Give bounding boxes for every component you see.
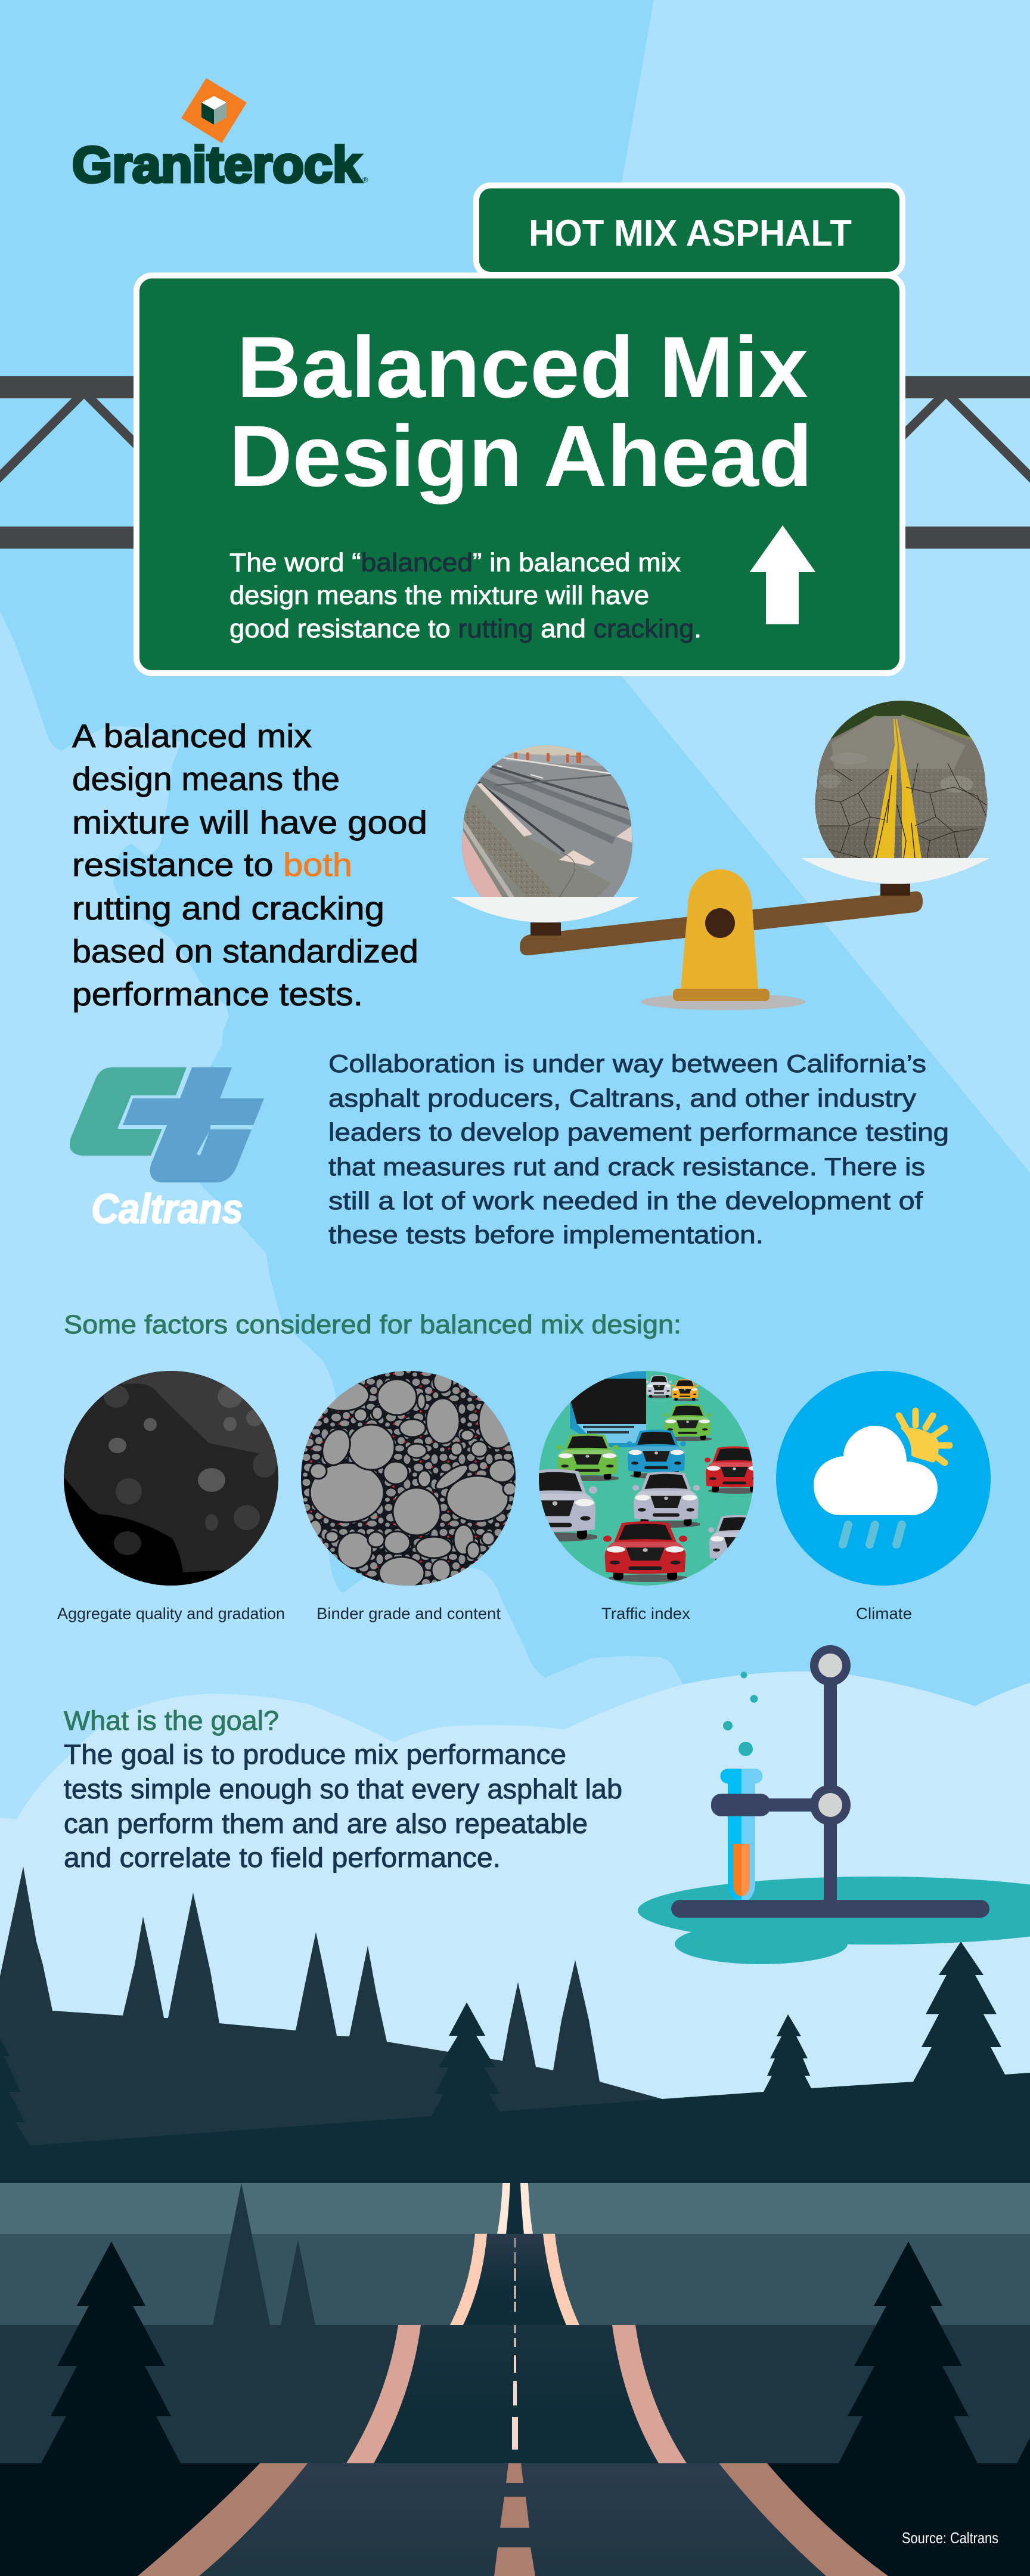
photo: rutted road (459, 742, 635, 900)
sign body text: design means the mixture will have (229, 581, 649, 610)
goal body: can perform them and are also repeatable (64, 1808, 588, 1839)
bus (570, 1371, 646, 1447)
road: third section (346, 2325, 687, 2463)
factor: traffic circle (539, 1371, 753, 1586)
factor: aggregate circle (60, 1366, 283, 1592)
teal puddle (638, 1877, 1030, 1964)
text: balanced mix definition: design means the (72, 760, 340, 797)
logo: Caltrans (70, 1067, 264, 1232)
text: balanced mix definition: rutting and cracking (72, 890, 384, 927)
factor: climate circle (776, 1371, 991, 1586)
text: collaboration paragraph: leaders to develop pavement performance testing (328, 1118, 949, 1146)
icon: up arrow (750, 525, 815, 624)
captions: Binder grade and content (317, 1605, 501, 1623)
road: far section (497, 2183, 533, 2234)
logo: Caltrans: Caltrans (91, 1185, 243, 1232)
photo: cracked road (813, 698, 989, 862)
captions: Traffic index (601, 1605, 691, 1623)
text: balanced mix definition: mixture will have good (72, 804, 427, 841)
text: collaboration paragraph: that measures rut and crack resistance. There is (328, 1153, 925, 1181)
text: collaboration paragraph (328, 1049, 949, 1249)
source credit: Source: Caltrans (902, 2529, 998, 2547)
goal body: and correlate to field performance. (64, 1842, 501, 1873)
heading: factors: Some factors considered for balanced mix design: (64, 1310, 681, 1339)
registered mark: ® (362, 175, 368, 184)
scale beam (520, 891, 923, 955)
text: balanced mix definition: performance tests. (72, 976, 363, 1013)
text: balanced mix definition: based on standardized (72, 933, 418, 970)
road landscape bands (0, 2183, 1030, 2576)
road: second section (450, 2234, 579, 2325)
background: upper right pale panel (622, 0, 1030, 1173)
icon: rain (843, 1525, 902, 1544)
front ridge with conifers (0, 1942, 1030, 2184)
text: balanced mix definition (72, 717, 427, 1013)
text: goal (64, 1705, 622, 1873)
right pan (801, 858, 989, 884)
goal body: The goal is to produce mix performance (64, 1739, 566, 1770)
bubbles (723, 1672, 758, 1756)
sign: main panel (136, 275, 902, 673)
factor: binder circle (298, 1368, 519, 1589)
goal body (64, 1739, 622, 1873)
background: pale cloud bank (0, 1671, 1030, 2206)
stand (671, 1645, 989, 1918)
text: collaboration paragraph: still a lot of work needed in the development of (328, 1187, 923, 1215)
foreground left tree (41, 2241, 181, 2463)
captions: Climate (856, 1605, 912, 1623)
foreground edge tree (1017, 2438, 1030, 2463)
left pan (451, 897, 640, 922)
scale stand shadow (641, 993, 805, 1010)
lab test tube illustration (638, 1645, 1030, 1964)
scale pivot (705, 908, 735, 938)
test tube (720, 1769, 763, 1902)
sign title (229, 318, 812, 504)
text: balanced mix definition: A balanced mix (72, 717, 312, 754)
goal heading: What is the goal? (64, 1705, 279, 1736)
logo wordmark: Graniterock (72, 137, 361, 193)
scale stand (681, 869, 758, 990)
sign title: Balanced Mix (237, 318, 808, 416)
foreground right tree (839, 2241, 978, 2463)
logo mark: orange diamond with cube (181, 78, 247, 143)
text: collaboration paragraph: asphalt producers, Caltrans, and other industry (328, 1084, 916, 1112)
balance scale illustration (451, 698, 989, 1010)
text: collaboration paragraph: Collaboration is under way between California’s (328, 1049, 926, 1078)
right pan stem (880, 884, 910, 896)
sign: hot mix asphalt tab (476, 185, 902, 275)
text: balanced mix definition: resistance to both (72, 846, 352, 883)
distant trees on band (213, 2183, 315, 2325)
scale foot (673, 989, 770, 1001)
back ridge with conifers (0, 1866, 662, 2182)
logo: Graniterock (72, 78, 361, 193)
icon: cloud (814, 1426, 938, 1515)
bridge truss behind sign (0, 376, 1030, 549)
sign title: Design Ahead (229, 407, 812, 504)
road: foreground section (138, 2463, 888, 2576)
goal body: tests simple enough so that every asphalt lab (64, 1773, 622, 1804)
sign body text (229, 548, 702, 643)
sign body text: good resistance to rutting and cracking. (229, 614, 702, 643)
icon: sun (899, 1411, 950, 1463)
background: left pale wave (0, 611, 683, 1849)
captions (57, 1605, 912, 1623)
left pan stem (530, 922, 561, 936)
sign body text: The word “balanced” in balanced mix (229, 548, 681, 577)
text: collaboration paragraph: these tests before implementation. (328, 1221, 764, 1249)
sign: hot mix asphalt tab: HOT MIX ASPHALT (529, 213, 852, 254)
captions: Aggregate quality and gradation (57, 1605, 285, 1623)
